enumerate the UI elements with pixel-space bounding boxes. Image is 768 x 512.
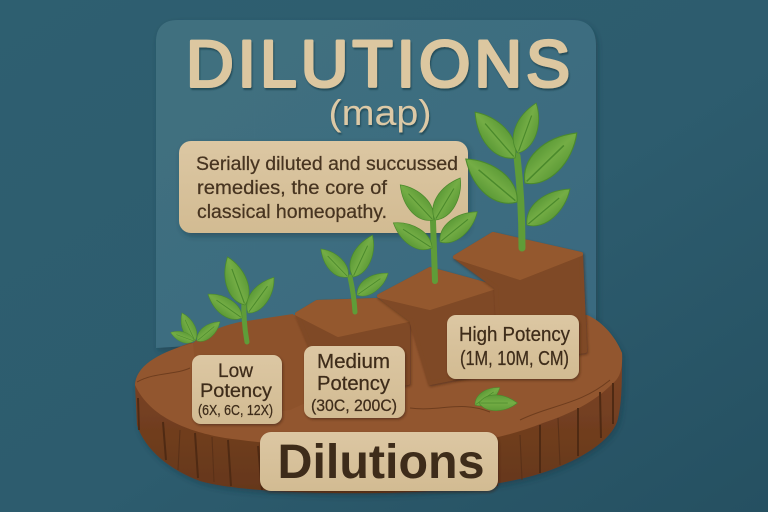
description callout: remedies, the core of [197,177,388,199]
subtitle: (map) [328,92,432,133]
label: dilutions: Dilutions [278,436,484,489]
step 2 soil block [297,300,408,390]
fallen leaf [471,382,517,411]
step 3 soil block [379,269,496,383]
label: medium potency: (30C, 200C) [311,396,397,415]
panel: backing board [156,20,596,348]
label: medium potency: Medium [317,351,390,373]
label: low potency: Low [218,361,253,382]
description callout: classical homeopathy. [197,201,387,223]
label: medium potency [304,346,405,418]
label: high potency [447,315,579,379]
plant on step 3 [388,173,483,281]
label: low potency: Potency [200,381,273,402]
title: DILUTIONS [186,26,570,100]
description callout [179,141,468,233]
label: high potency: High Potency [459,324,570,346]
small sprout, left [169,310,224,346]
description callout: Serially diluted and succussed [196,153,458,175]
wooden base disc [135,315,622,493]
label: high potency: (1M, 10M, CM) [460,348,569,370]
step 1 soil mound [193,314,312,420]
medium potency plant [315,231,393,312]
label: low potency: (6X, 6C, 12X) [198,403,273,419]
low potency plant [203,253,281,342]
label: low potency [192,355,282,424]
label: medium potency: Potency [317,373,390,395]
step 4 soil block [455,234,585,363]
tallest plant on step 4 [457,99,587,248]
